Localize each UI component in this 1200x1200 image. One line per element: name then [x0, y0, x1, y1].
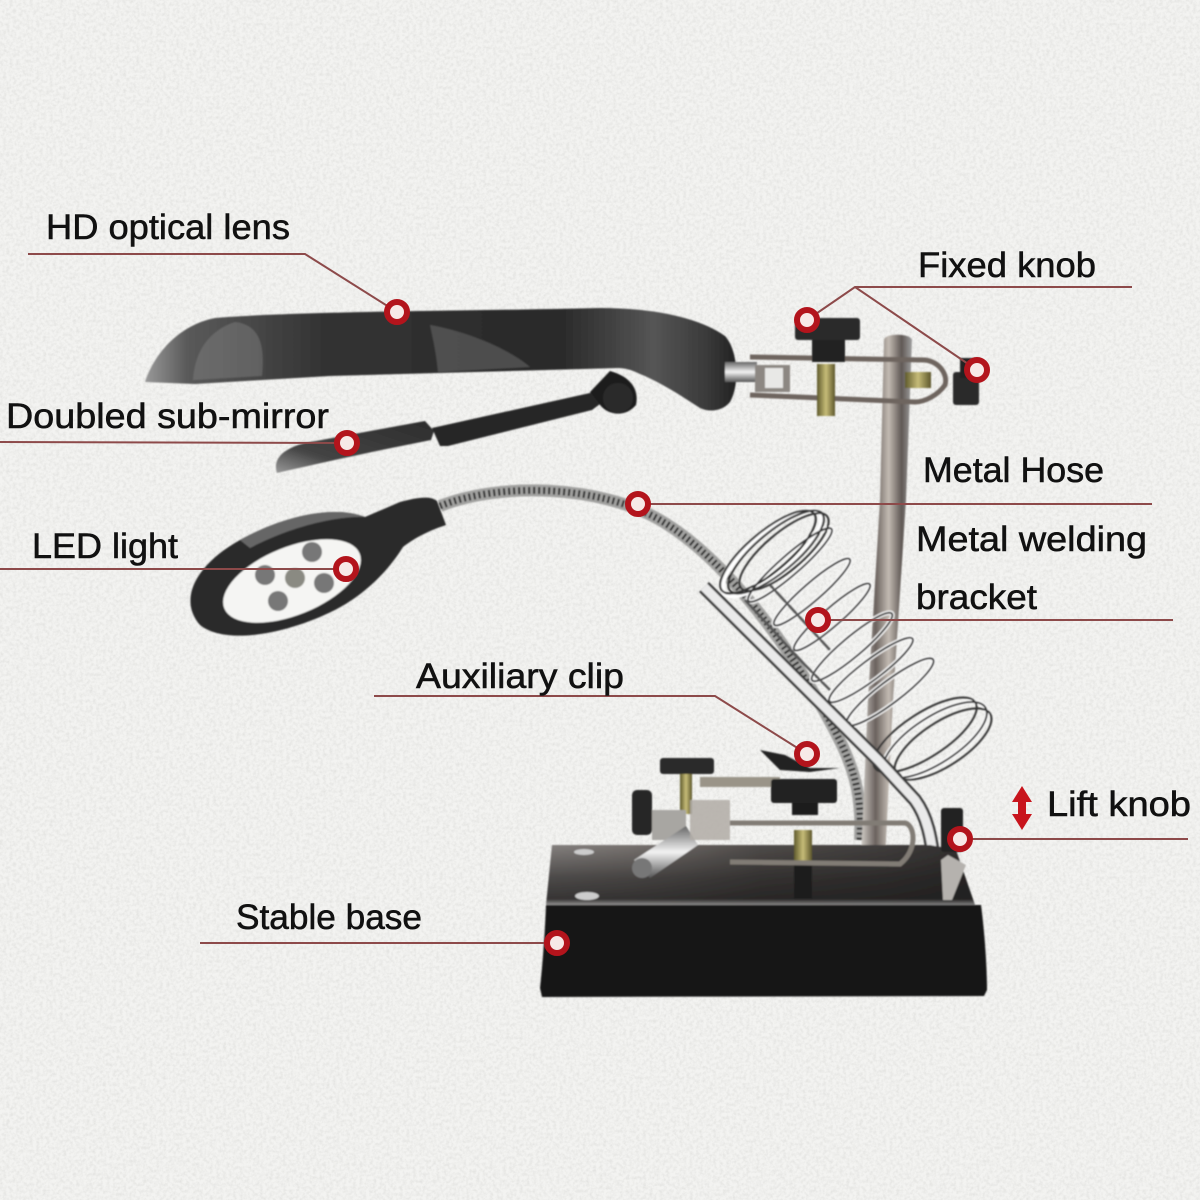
sub-mirror with folding arm — [276, 371, 637, 473]
callout: Metal welding bracket — [808, 520, 1173, 630]
callout: LED light — [0, 527, 356, 579]
callout: HD optical lens — [28, 208, 407, 322]
magnifier lens head — [145, 308, 736, 410]
callout: Stable base — [200, 898, 567, 953]
callout: Doubled sub-mirror — [0, 397, 357, 453]
icon: red up-down arrow — [1012, 786, 1032, 830]
callout: HD optical lens: HD optical lens — [46, 208, 290, 247]
callout: Auxiliary clip: Auxiliary clip — [416, 657, 624, 696]
stable base — [540, 845, 987, 997]
LED lamp head — [190, 498, 446, 640]
callout: Auxiliary clip — [374, 657, 817, 764]
product illustration — [145, 308, 1002, 997]
callout: Metal Hose: Metal Hose — [923, 451, 1104, 490]
callout: LED light: LED light — [32, 527, 178, 566]
callout: Metal welding bracket: Metal welding — [916, 520, 1147, 559]
callout: Fixed knob: Fixed knob — [918, 246, 1096, 285]
callout: Doubled sub-mirror: Doubled sub-mirror — [6, 397, 329, 436]
lower clamp and auxiliary clip — [632, 750, 963, 899]
metal welding bracket — [704, 497, 1002, 875]
callout: Metal Hose — [628, 451, 1152, 514]
callout: Metal welding bracket: bracket — [916, 578, 1037, 617]
top clamp with fixed knobs — [725, 318, 980, 416]
vertical metal pole — [860, 335, 912, 880]
gooseneck metal hose — [440, 490, 860, 840]
callout: Lift knob — [950, 785, 1191, 849]
callout: Fixed knob — [797, 246, 1132, 380]
callout: Stable base: Stable base — [236, 898, 422, 937]
callout: Lift knob: Lift knob — [1047, 785, 1191, 824]
